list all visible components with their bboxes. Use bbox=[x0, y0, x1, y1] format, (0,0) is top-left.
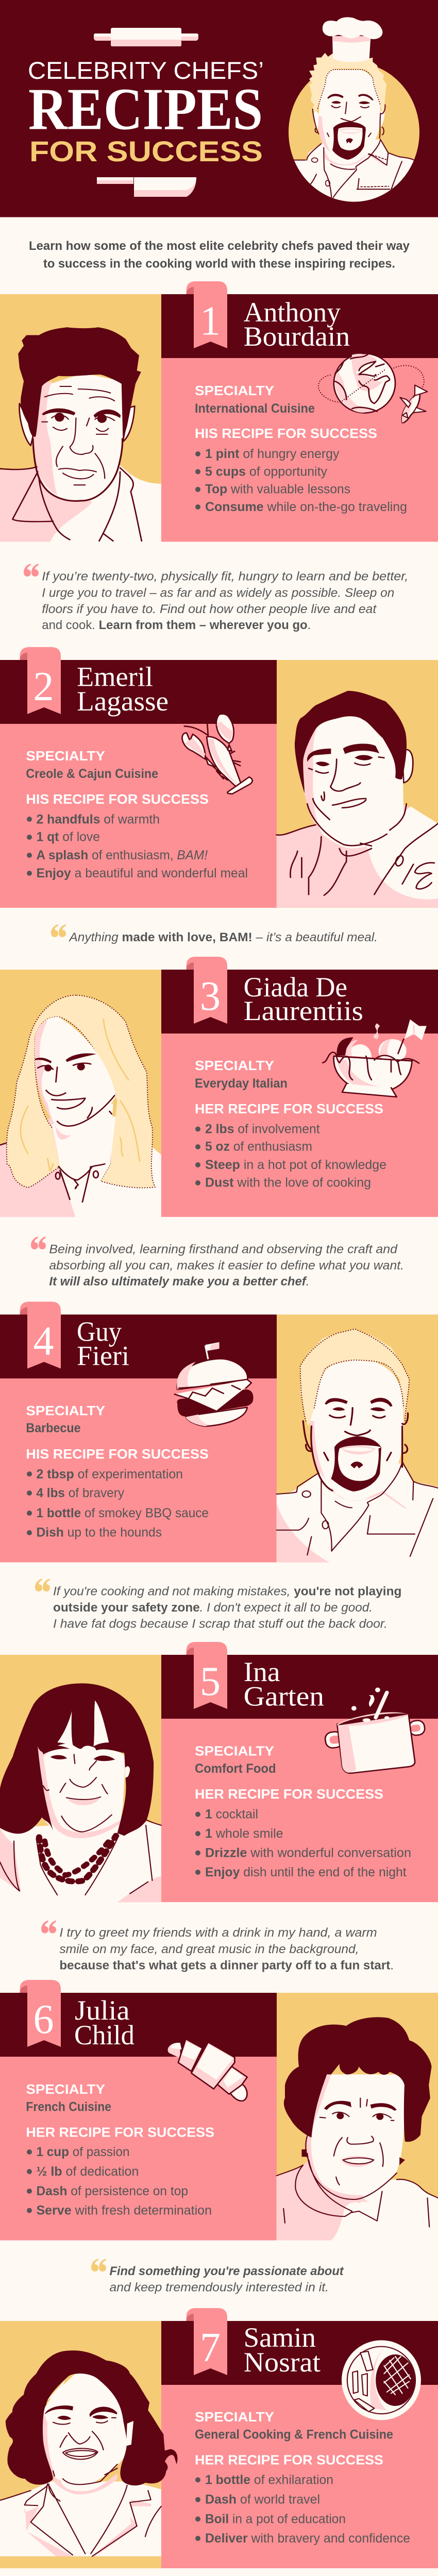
title bbox=[28, 57, 264, 167]
title: RECIPES bbox=[28, 76, 263, 142]
specialty and recipe: A splash of enthusiasm, BAM! bbox=[36, 848, 208, 862]
specialty and recipe: Dash of world travel bbox=[205, 2493, 320, 2507]
ribbon badge: 1 bbox=[200, 299, 221, 344]
name bbox=[244, 972, 363, 1026]
specialty and recipe: Top with valuable lessons bbox=[205, 482, 350, 497]
ribbon badge: 2 bbox=[33, 664, 54, 709]
specialty and recipe: General Cooking & French Cuisine bbox=[195, 2428, 393, 2442]
ribbon badge bbox=[187, 281, 227, 348]
specialty and recipe: 1 cup of passion bbox=[36, 2145, 130, 2159]
specialty and recipe: SPECIALTY bbox=[195, 1743, 274, 1759]
intro text: Learn how some of the most elite celebrity chefs paved their way bbox=[29, 239, 410, 253]
ribbon badge bbox=[187, 957, 227, 1024]
ribbon badge bbox=[187, 1642, 227, 1709]
name: Nosrat bbox=[244, 2347, 321, 2378]
icon: quote mark bbox=[41, 1921, 56, 1933]
specialty and recipe: 1 cocktail bbox=[205, 1807, 258, 1822]
ribbon badge bbox=[20, 647, 61, 714]
ribbon badge: 5 bbox=[200, 1659, 221, 1704]
specialty and recipe: Barbecue bbox=[26, 1421, 81, 1435]
quote: Guy Fieri: If you're cooking and not making mistakes, you're not playing bbox=[53, 1584, 401, 1598]
specialty and recipe bbox=[195, 2409, 410, 2546]
quote: Julia Child: Find something you're passionate about bbox=[109, 2264, 344, 2278]
quote: Anthony Bourdain: If you’re twenty-two, physically fit, hungry to learn and be better, bbox=[42, 570, 408, 583]
specialty and recipe: Boil in a pot of education bbox=[205, 2512, 346, 2526]
name: Guy bbox=[77, 1316, 122, 1347]
portrait: Giada De Laurentiis bbox=[0, 995, 161, 1217]
specialty and recipe: Enjoy a beautiful and wonderful meal bbox=[36, 866, 248, 880]
specialty and recipe: Everyday Italian bbox=[195, 1076, 288, 1091]
quote: Ina Garten: smile on my face, and great music in the background, bbox=[59, 1942, 359, 1956]
specialty and recipe: HIS RECIPE FOR SUCCESS bbox=[26, 1446, 209, 1462]
quote: Julia Child: and keep tremendously interested in it. bbox=[109, 2280, 329, 2294]
intro text bbox=[29, 239, 410, 271]
specialty and recipe: HER RECIPE FOR SUCCESS bbox=[195, 1101, 383, 1116]
specialty and recipe: SPECIALTY bbox=[195, 2409, 274, 2425]
header banner bbox=[0, 0, 438, 217]
panel: 1 Anthony Bourdain bbox=[0, 281, 438, 542]
specialty and recipe: Dash of persistence on top bbox=[36, 2184, 188, 2198]
icon: croissant bbox=[168, 2039, 247, 2101]
quote: Giada De Laurentiis: It will also ultimately make you a better chef. bbox=[49, 1275, 309, 1289]
ribbon badge: 7 bbox=[200, 2325, 221, 2370]
quote: Anthony Bourdain bbox=[24, 564, 408, 632]
specialty and recipe: French Cuisine bbox=[26, 2099, 111, 2114]
specialty and recipe: Comfort Food bbox=[195, 1761, 276, 1776]
name: Laurentiis bbox=[244, 995, 363, 1026]
panel: 4 Guy Fieri bbox=[0, 1301, 438, 1563]
ribbon badge bbox=[187, 2308, 227, 2375]
icon: quote mark bbox=[35, 1579, 50, 1591]
quote: Anthony Bourdain: and cook. Learn from them – wherever you go. bbox=[42, 618, 311, 632]
panel: 7 Samin Nosrat bbox=[0, 2308, 438, 2568]
quote: Julia Child bbox=[91, 2259, 344, 2294]
quote: Giada De Laurentiis: Being involved, learning firsthand and observing the craft and bbox=[49, 1243, 398, 1257]
name bbox=[244, 297, 350, 352]
specialty and recipe: ½ lb of dedication bbox=[36, 2164, 139, 2179]
quote: Emeril Lagasse: Anything made with love, BAM! – it’s a beautiful meal. bbox=[68, 930, 378, 944]
specialty and recipe: Enjoy dish until the end of the night bbox=[205, 1865, 407, 1879]
portrait: Julia Child bbox=[277, 2017, 438, 2240]
name: Bourdain bbox=[244, 321, 350, 352]
quote: Guy Fieri: outside your safety zone. I don't expect it all to be good. bbox=[53, 1601, 373, 1615]
specialty and recipe: SPECIALTY bbox=[195, 1058, 274, 1073]
icon: plated food bbox=[342, 2340, 421, 2420]
icon: burger bbox=[175, 1342, 254, 1426]
name: Fieri bbox=[77, 1341, 129, 1371]
name: Samin bbox=[244, 2322, 316, 2353]
ribbon badge: 4 bbox=[33, 1319, 54, 1364]
specialty and recipe: HIS RECIPE FOR SUCCESS bbox=[26, 791, 209, 807]
quote: Anthony Bourdain: floors if you have to. Find out how other people live and eat bbox=[42, 602, 377, 616]
name: Julia bbox=[75, 1995, 130, 2026]
specialty and recipe: 1 qt of love bbox=[36, 830, 100, 844]
ribbon badge: 3 bbox=[200, 974, 221, 1019]
specialty and recipe bbox=[26, 1403, 209, 1540]
intro text: to success in the cooking world with these inspiring recipes. bbox=[43, 257, 395, 271]
quote: Giada De Laurentiis bbox=[31, 1236, 404, 1289]
specialty and recipe: SPECIALTY bbox=[26, 748, 105, 764]
name: Anthony bbox=[244, 297, 341, 328]
name: Giada De bbox=[244, 972, 347, 1003]
portrait: Anthony Bourdain bbox=[0, 327, 161, 542]
title: CELEBRITY CHEFS’ bbox=[28, 57, 264, 84]
specialty and recipe: Deliver with bravery and confidence bbox=[205, 2531, 410, 2546]
name bbox=[77, 662, 169, 717]
specialty and recipe: SPECIALTY bbox=[195, 383, 274, 398]
specialty and recipe: Serve with fresh determination bbox=[36, 2203, 212, 2217]
specialty and recipe: International Cuisine bbox=[195, 401, 315, 416]
icon: cleaver knife bbox=[97, 177, 196, 197]
name: Garten bbox=[244, 1681, 324, 1712]
panel: 5 Ina Garten bbox=[0, 1642, 438, 1902]
quote: Guy Fieri: I have fat dogs because I scrap that stuff out the back door. bbox=[53, 1617, 388, 1631]
quote: Anthony Bourdain: I urge you to travel – as far and as widely as possible. Sleep on bbox=[42, 586, 394, 600]
specialty and recipe: 2 lbs of involvement bbox=[205, 1122, 320, 1137]
specialty and recipe: Dish up to the hounds bbox=[36, 1526, 162, 1540]
icon: quote mark bbox=[91, 2259, 106, 2272]
specialty and recipe: 1 pint of hungry energy bbox=[205, 447, 340, 461]
quote: Ina Garten: I try to greet my friends with a drink in my hand, a warm bbox=[59, 1926, 377, 1940]
quote: Giada De Laurentiis: absorbing all you can, makes it easier to define what you want. bbox=[49, 1259, 404, 1273]
quote: Ina Garten bbox=[41, 1921, 394, 1972]
name: Emeril bbox=[77, 662, 153, 692]
icon: rolling pin bbox=[94, 28, 198, 46]
panel: 3 Giada De Laurentiis bbox=[0, 957, 438, 1217]
portrait: Samin Nosrat bbox=[0, 2350, 178, 2556]
icon: globe and plane bbox=[318, 353, 427, 423]
icon: cooking pot bbox=[324, 1688, 426, 1773]
ribbon badge: 6 bbox=[33, 1997, 54, 2042]
name bbox=[74, 1995, 134, 2050]
specialty and recipe: 5 oz of enthusiasm bbox=[205, 1140, 312, 1154]
name bbox=[77, 1316, 129, 1371]
ribbon badge bbox=[20, 1980, 61, 2047]
panel: 2 Emeril Lagasse bbox=[0, 647, 438, 908]
name: Ina bbox=[244, 1656, 280, 1687]
name bbox=[244, 2322, 321, 2378]
specialty and recipe: 2 tbsp of experimentation bbox=[36, 1467, 183, 1481]
ribbon badge bbox=[20, 1301, 61, 1368]
specialty and recipe: 1 bottle of smokey BBQ sauce bbox=[36, 1506, 209, 1520]
specialty and recipe bbox=[26, 748, 248, 880]
specialty and recipe: Steep in a hot pot of knowledge bbox=[205, 1158, 386, 1172]
specialty and recipe bbox=[195, 383, 407, 514]
specialty and recipe: Drizzle with wonderful conversation bbox=[205, 1846, 411, 1860]
specialty and recipe bbox=[26, 2081, 214, 2217]
specialty and recipe: Creole & Cajun Cuisine bbox=[26, 767, 158, 781]
specialty and recipe: HER RECIPE FOR SUCCESS bbox=[195, 2452, 383, 2468]
title: FOR SUCCESS bbox=[29, 135, 263, 167]
specialty and recipe: HIS RECIPE FOR SUCCESS bbox=[195, 426, 377, 441]
specialty and recipe: HER RECIPE FOR SUCCESS bbox=[195, 1786, 383, 1802]
portrait: Ina Garten bbox=[0, 1683, 161, 1902]
name: Child bbox=[74, 2020, 134, 2050]
specialty and recipe bbox=[195, 1743, 411, 1879]
specialty and recipe bbox=[195, 1058, 386, 1190]
quote: Emeril Lagasse bbox=[51, 924, 378, 944]
icon: quote mark bbox=[31, 1236, 46, 1249]
specialty and recipe: Dust with the love of cooking bbox=[205, 1176, 371, 1190]
portrait: Guy Fieri bbox=[277, 1329, 438, 1563]
specialty and recipe: SPECIALTY bbox=[26, 2081, 105, 2097]
specialty and recipe: 2 handfuls of warmth bbox=[36, 812, 160, 826]
specialty and recipe: HER RECIPE FOR SUCCESS bbox=[26, 2124, 214, 2140]
name: Lagasse bbox=[77, 686, 169, 717]
panel: 6 Julia Child bbox=[0, 1980, 438, 2240]
specialty and recipe: SPECIALTY bbox=[26, 1403, 105, 1418]
quote: Ina Garten: because that's what gets a dinner party off to a fun start. bbox=[59, 1958, 394, 1972]
specialty and recipe: 4 lbs of bravery bbox=[36, 1486, 124, 1500]
illustration: chef Guy Fieri with hat bbox=[289, 17, 419, 202]
specialty and recipe: 5 cups of opportunity bbox=[205, 465, 327, 479]
icon: quote mark bbox=[24, 564, 39, 577]
specialty and recipe: 1 whole smile bbox=[205, 1826, 283, 1841]
portrait: Emeril Lagasse bbox=[277, 691, 438, 908]
specialty and recipe: 1 bottle of exhilaration bbox=[205, 2472, 333, 2487]
icon: quote mark bbox=[51, 924, 66, 937]
icon: crawfish bbox=[182, 714, 252, 794]
quote: Guy Fieri bbox=[35, 1579, 401, 1631]
name bbox=[244, 1656, 324, 1712]
icon: pasta bowl bbox=[323, 1020, 427, 1097]
specialty and recipe: Consume while on-the-go traveling bbox=[205, 500, 407, 514]
